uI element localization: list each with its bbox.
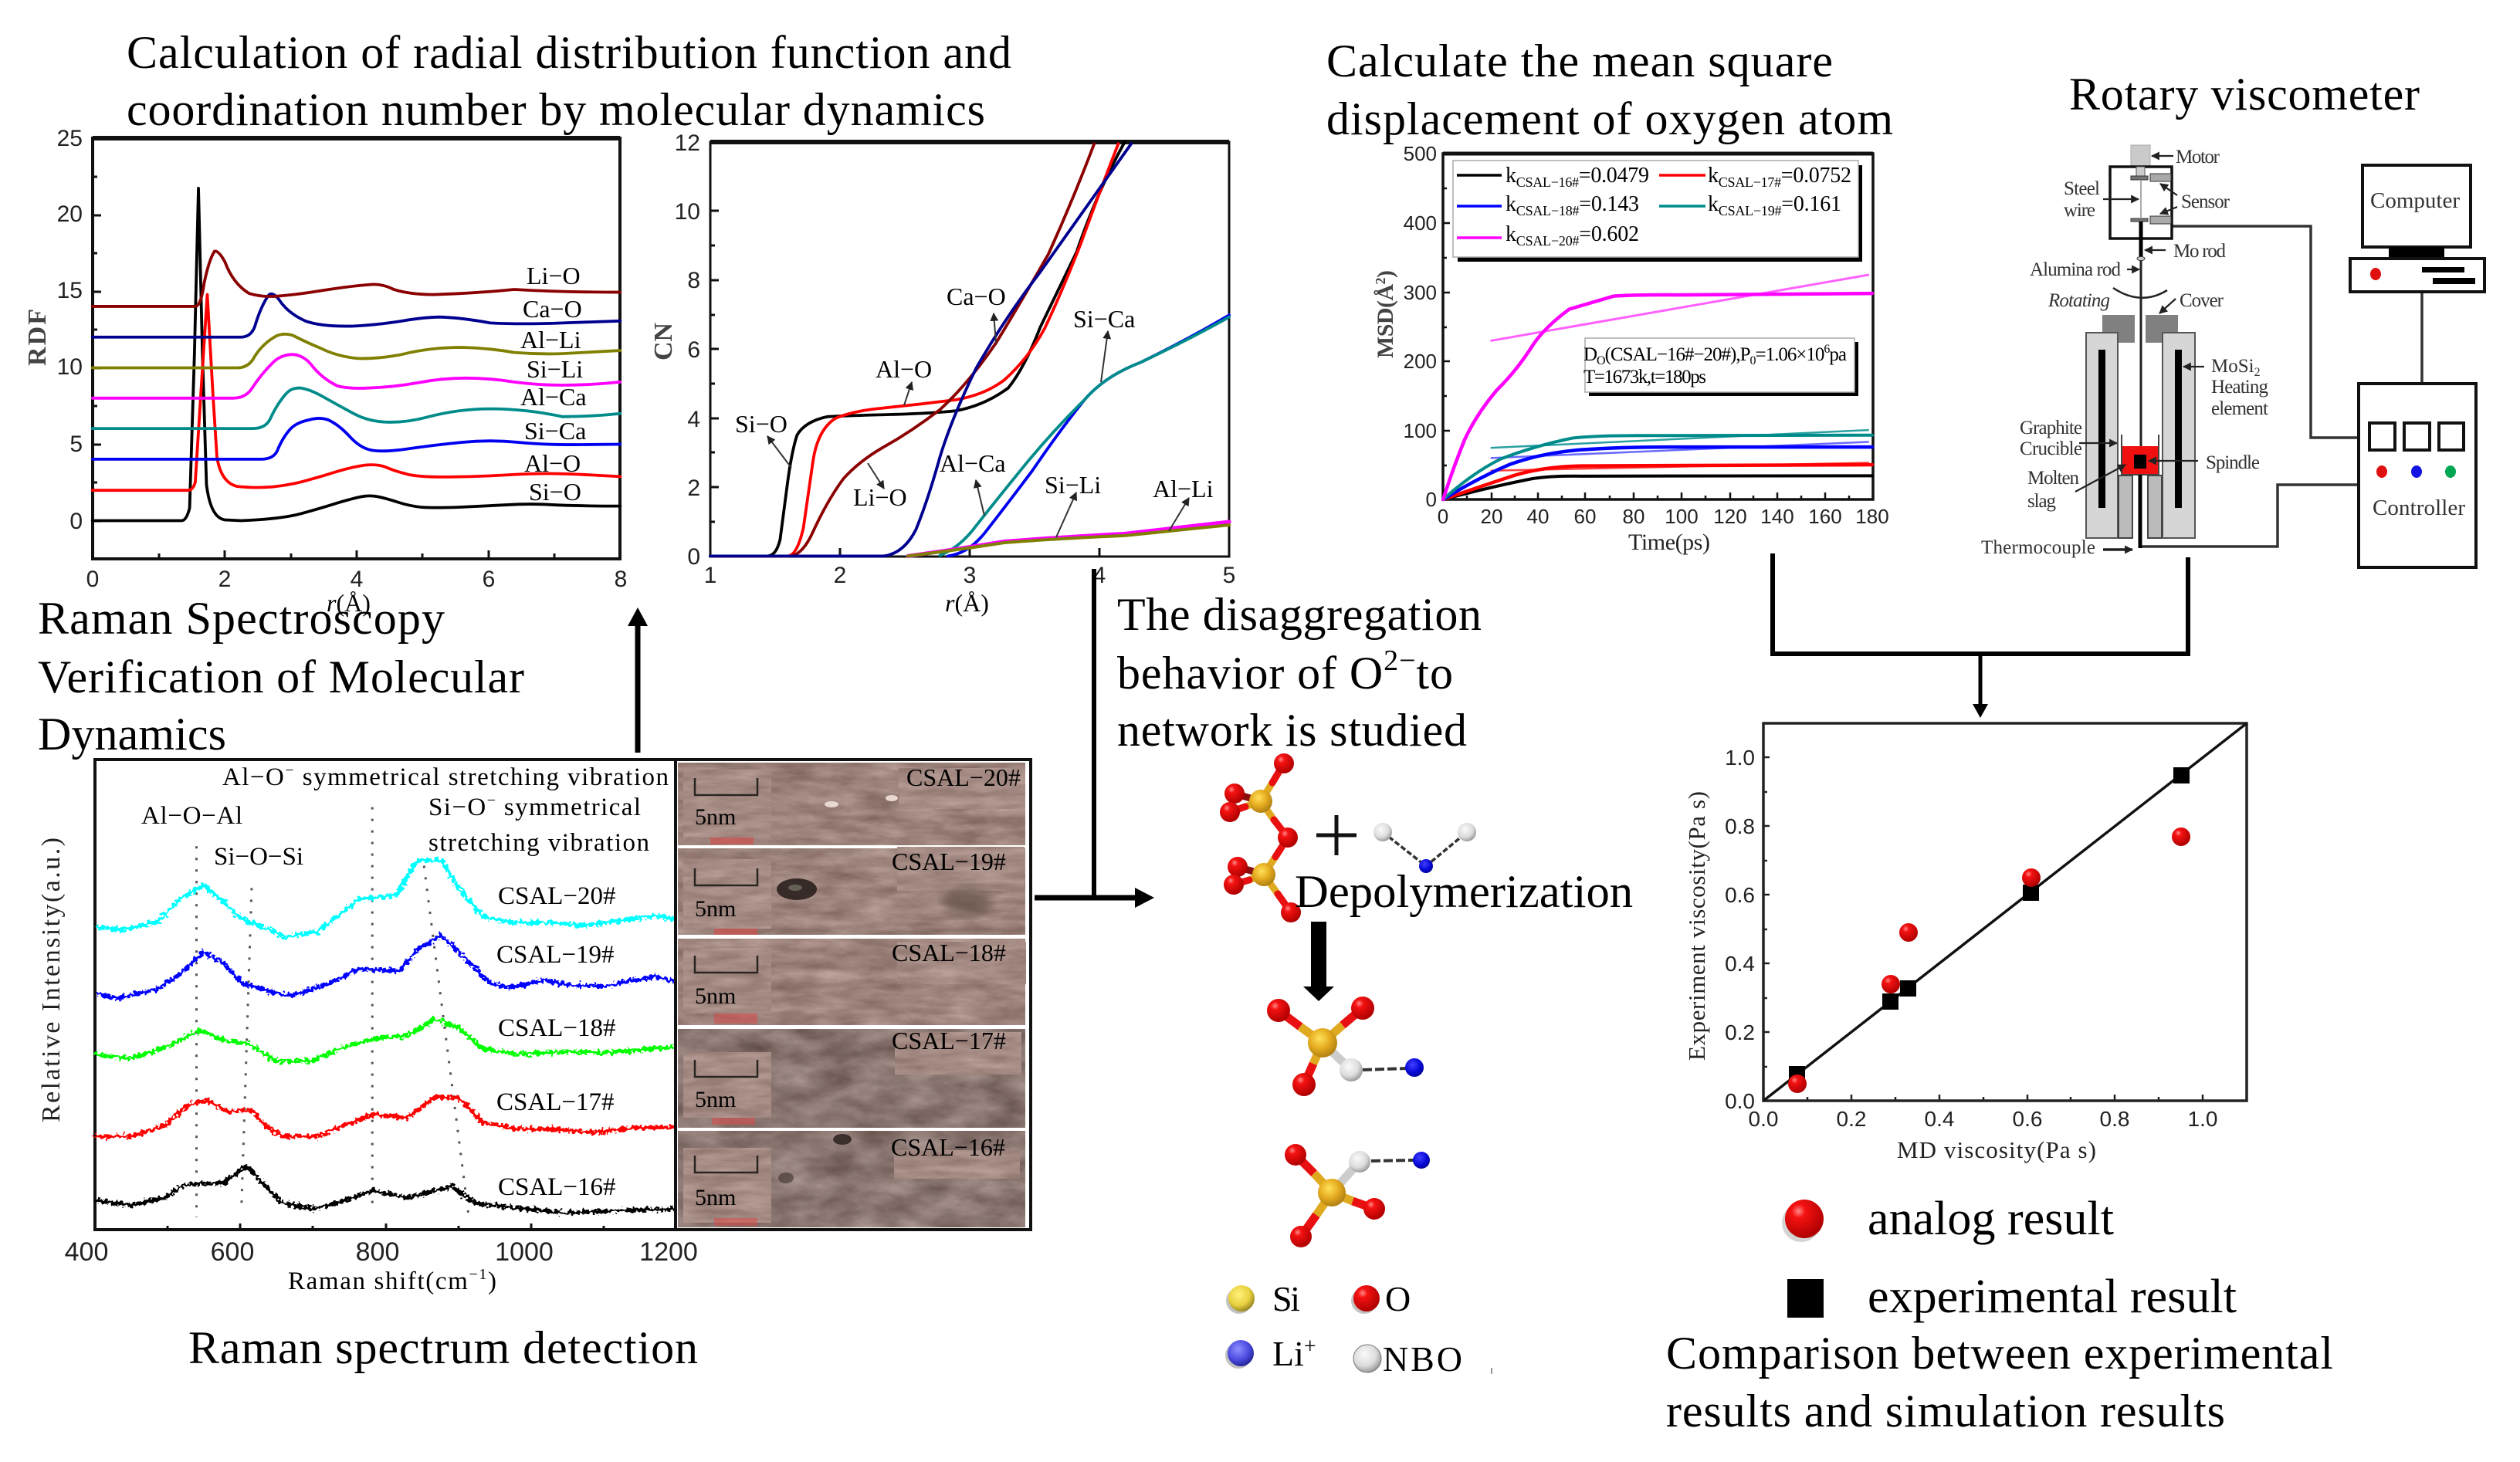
CN axis numbers: 6	[687, 337, 700, 363]
parity axis numbers: 0.0	[1749, 1107, 1778, 1131]
legend: atom types	[1225, 1279, 1462, 1379]
legend O	[1351, 1279, 1411, 1318]
viscometer part labels: Rotating	[2048, 290, 2110, 311]
parity axis numbers: 0.8	[2100, 1107, 2129, 1131]
CN leader arrows	[767, 313, 1189, 537]
CN axis numbers: 8	[687, 268, 700, 293]
Raman guide dotted lines	[197, 807, 469, 1217]
MSD axis numbers	[1404, 142, 1889, 528]
parity axis titles: Experiment viscosity(Pa s)	[1683, 791, 1710, 1061]
MSD parameter box: =1.06×10	[1755, 344, 1824, 365]
RDF curve lines	[93, 188, 620, 520]
computer: Computer	[2370, 188, 2460, 213]
parity axis numbers: 0.8	[1725, 814, 1755, 838]
MSD legend box: =0.0752	[1781, 164, 1851, 188]
Raman band labels: symmetrical stretching vibration	[295, 763, 669, 791]
heading: disaggregation behaviour: to	[1416, 648, 1453, 699]
viscometer leader arrows	[2075, 156, 2204, 550]
heading: Raman verification: Raman Spectroscopy	[38, 593, 445, 644]
connecting wires	[2140, 226, 2422, 547]
CN axis numbers: 0	[687, 544, 700, 570]
MSD axis numbers: 400	[1404, 212, 1437, 235]
molecule: lower silicate with NBO	[1285, 1144, 1430, 1247]
viscometer part labels	[1981, 147, 2268, 558]
Raman sample labels: CSAL−17#	[496, 1088, 614, 1116]
parity line	[1763, 723, 2247, 1101]
heading: disaggregation behaviour: The disaggregation	[1117, 589, 1482, 640]
RDF axis titles: RDF	[23, 309, 52, 366]
viscometer part labels: Steel	[2064, 178, 2100, 199]
CN curve lines	[710, 142, 1229, 556]
Raman band labels: symmetrical	[496, 794, 641, 821]
MSD legend box: k	[1506, 192, 1516, 216]
RDF pair labels	[520, 262, 587, 506]
MSD axis numbers: 140	[1760, 505, 1794, 528]
viscometer part labels: Molten	[2027, 468, 2080, 489]
parity axis numbers: 0.2	[1837, 1107, 1866, 1131]
panel: electron micrographs	[676, 760, 1031, 1230]
Raman axis numbers: 1200	[639, 1237, 698, 1267]
CN pair labels	[735, 283, 1214, 511]
MSD axis titles: Time(ps)	[1628, 530, 1710, 555]
chart: coordination number curves	[649, 130, 1235, 617]
heading: rotary viscometer: Rotary viscometer	[2069, 69, 2420, 120]
micrograph frame	[676, 760, 1031, 1230]
RDF pair labels: Si−Ca	[524, 417, 586, 445]
parity axis numbers: 1.0	[1725, 746, 1755, 770]
MSD legend box	[1453, 161, 1862, 262]
silicate atoms	[1220, 753, 1301, 922]
Raman band labels: stretching vibration	[428, 829, 649, 857]
MSD curves	[1443, 275, 1872, 499]
MSD axis numbers: 20	[1481, 505, 1502, 528]
RDF axis numbers: 0	[69, 509, 83, 534]
legend Li: +	[1304, 1335, 1316, 1359]
Raman sample labels: CSAL−19#	[496, 941, 614, 969]
micrograph CSAL-17	[678, 1027, 1025, 1128]
micrograph CSAL-19	[678, 847, 1025, 935]
MSD axis numbers: 0	[1438, 505, 1448, 528]
CN axis numbers	[675, 130, 1235, 588]
Raman axis numbers: 400	[65, 1237, 108, 1267]
MSD legend box: CSAL−20#	[1516, 233, 1579, 249]
micrograph CSAL-17: 5nm	[695, 1087, 736, 1112]
MSD parameter box: D	[1583, 344, 1597, 365]
heading: radial distribution function	[127, 27, 1011, 135]
MSD axis numbers: 80	[1623, 505, 1644, 528]
RDF axis numbers: 4	[351, 567, 363, 592]
MSD axis titles: 2	[1373, 277, 1388, 284]
Raman band labels: Si−O	[428, 794, 486, 821]
MSD legend box: =0.161	[1781, 192, 1841, 216]
legend Li: Li	[1272, 1334, 1304, 1373]
heading: radial distribution function: Calculation of radial distribution function and	[127, 27, 1011, 78]
controller: Controller	[2373, 496, 2465, 520]
CN axis numbers: 2	[687, 475, 700, 501]
MSD legend box: k	[1708, 192, 1719, 216]
legend O: O	[1385, 1279, 1411, 1318]
MSD axis numbers: 100	[1404, 419, 1437, 442]
heading: disaggregation behaviour: behavior of O	[1117, 648, 1383, 699]
RDF pair labels: Li−O	[527, 262, 581, 289]
CN plot frame	[710, 142, 1229, 557]
Raman axis numbers: 600	[211, 1237, 254, 1267]
CN pair labels: Ca−O	[947, 283, 1006, 310]
experimental markers	[1789, 767, 2190, 1082]
arrow: Raman up to MD	[628, 607, 648, 753]
heading: comparison	[1666, 1328, 2333, 1437]
viscometer part labels: Cover	[2180, 290, 2224, 311]
legend: analog and experimental results	[1782, 1193, 2237, 1323]
micrograph CSAL-16: CSAL−16#	[891, 1133, 1005, 1161]
CN axis numbers: 10	[675, 199, 700, 225]
RDF axis numbers: 8	[615, 567, 627, 592]
arrow: depolymerization down	[1303, 922, 1334, 1001]
chart: Raman spectra	[37, 760, 698, 1295]
micrograph CSAL-20: 5nm	[695, 804, 736, 830]
silicate bonds	[1230, 763, 1291, 912]
parity axis numbers: 0.6	[1725, 883, 1755, 907]
RDF axis titles: r(Å)	[327, 589, 371, 617]
parity axis numbers: 0.4	[1725, 952, 1755, 976]
CN axis numbers: 5	[1223, 563, 1235, 588]
MSD legend box: CSAL−17#	[1719, 174, 1781, 190]
MSD parameter box: 6	[1824, 343, 1830, 356]
Raman band labels: −	[285, 762, 294, 779]
micrograph CSAL-19: CSAL−19#	[892, 848, 1006, 875]
MSD parameter box	[1583, 338, 1858, 396]
parity axis numbers: 0.0	[1725, 1089, 1755, 1113]
MSD axis numbers: 60	[1574, 505, 1596, 528]
RDF pair labels: Al−Li	[520, 326, 581, 354]
RDF pair labels: Al−Ca	[520, 383, 587, 411]
CN axis numbers: 4	[687, 407, 700, 432]
rod	[2113, 222, 2167, 455]
MSD parameter box: (CSAL−16#−20#),P	[1605, 344, 1750, 365]
molecule: linked silicate tetrahedra	[1220, 753, 1301, 922]
Raman axis titles: )	[488, 1267, 496, 1295]
chart: RDF curves	[23, 126, 627, 617]
CN axis numbers: 1	[704, 563, 716, 588]
CN axis numbers: 12	[675, 130, 700, 156]
micrograph CSAL-18: 5nm	[695, 983, 736, 1009]
Raman sample labels	[496, 882, 615, 1201]
viscometer part labels: Motor	[2176, 147, 2220, 168]
heading: Raman spectrum detection: Raman spectrum detection	[188, 1322, 698, 1373]
heading: Raman verification: Verification of Molecular	[38, 651, 524, 702]
CN pair labels: Si−Ca	[1073, 305, 1135, 333]
MSD axis numbers: 100	[1665, 505, 1699, 528]
viscometer part labels: element	[2211, 398, 2268, 419]
viscometer part labels: Graphite	[2020, 418, 2082, 438]
heading: disaggregation behaviour: network is studied	[1117, 705, 1467, 756]
Raman axis numbers: 800	[356, 1237, 399, 1267]
viscometer part labels: Mo rod	[2173, 241, 2227, 262]
Raman axis titles: Raman shift(cm	[288, 1267, 468, 1295]
MSD axis titles: MSD(Å	[1373, 284, 1398, 358]
computer	[2350, 165, 2484, 292]
parity axis titles: MD viscosity(Pa s)	[1897, 1136, 2096, 1163]
heading: radial distribution function: coordination number by molecular dynamics	[127, 84, 985, 135]
RDF axis numbers: 5	[69, 431, 83, 457]
Raman axis titles: Relative Intensity(a.u.)	[37, 838, 66, 1122]
Raman sample labels: CSAL−18#	[498, 1014, 615, 1042]
legend Si	[1226, 1279, 1300, 1318]
legend experimental: experimental result	[1868, 1271, 2237, 1323]
RDF axis numbers	[57, 126, 627, 592]
furnace walls	[2086, 333, 2195, 538]
heading: mean square displacement: Calculate the mean square	[1326, 36, 1833, 86]
Raman axis titles	[37, 838, 496, 1295]
CN pair labels: Li−O	[853, 483, 907, 511]
RDF plot frame	[93, 138, 620, 559]
RDF pair labels: Si−Li	[527, 355, 583, 383]
Raman band labels: −	[487, 792, 496, 809]
Raman frame	[95, 760, 676, 1230]
CN pair labels: Al−O	[876, 355, 932, 383]
CN axis numbers: 3	[964, 563, 976, 588]
controller	[2359, 384, 2476, 567]
CN pair labels: Si−O	[735, 410, 788, 438]
Raman band labels: Al−O	[222, 763, 284, 791]
micrograph CSAL-16: 5nm	[695, 1185, 736, 1210]
heading: comparison: Comparison between experimental	[1666, 1328, 2333, 1379]
MSD axis numbers: 160	[1808, 505, 1842, 528]
RDF axis numbers: 6	[483, 567, 495, 592]
micrograph CSAL-20	[678, 763, 1025, 845]
viscometer part labels: MoSi	[2211, 356, 2254, 377]
Raman band labels: Al−O−Al	[141, 802, 242, 830]
Raman axis titles: −1	[469, 1266, 486, 1283]
MSD legend box: k	[1506, 222, 1516, 246]
CN axis numbers: 4	[1093, 563, 1106, 588]
MSD parameter box: 0	[1749, 354, 1756, 367]
RDF axis numbers: 10	[57, 354, 83, 380]
viscometer part labels: Sensor	[2181, 191, 2230, 212]
viscometer part labels: Spindle	[2206, 452, 2260, 473]
viscometer part labels: wire	[2064, 200, 2095, 221]
MSD axis numbers: 180	[1855, 505, 1889, 528]
RDF axis numbers: 20	[57, 201, 83, 227]
label: Depolymerization: Depolymerization	[1295, 866, 1633, 918]
MSD frame	[1443, 154, 1873, 499]
Raman sample labels: CSAL−16#	[498, 1173, 615, 1201]
parity axis numbers: 0.4	[1925, 1107, 1954, 1131]
MSD legend box: CSAL−19#	[1719, 203, 1781, 218]
heading: disaggregation behaviour	[1117, 589, 1482, 756]
heading: mean square displacement: displacement of oxygen atom	[1326, 93, 1893, 144]
heading: disaggregation behaviour: 2−	[1384, 645, 1416, 677]
parity axis numbers: 0.6	[2013, 1107, 2042, 1131]
arrow: Raman to depolymerization and up to CN	[1035, 569, 1154, 908]
chart: experiment vs MD viscosity	[1683, 723, 2247, 1163]
motor	[2131, 145, 2150, 167]
CN axis numbers: 2	[834, 563, 846, 588]
CN pair labels: Al−Ca	[940, 449, 1006, 477]
micrograph CSAL-17: CSAL−17#	[892, 1027, 1006, 1054]
MSD legend box: CSAL−18#	[1516, 203, 1579, 218]
parity axis numbers: 1.0	[2188, 1107, 2217, 1131]
legend analog: analog result	[1868, 1193, 2114, 1245]
MSD parameter box: T=1673k,t=180ps	[1583, 367, 1706, 387]
CN pair labels: Al−Li	[1153, 475, 1214, 503]
MSD axis numbers: 0	[1426, 488, 1437, 511]
MSD legend box: =0.0479	[1579, 164, 1649, 188]
CN pair labels: Si−Li	[1045, 471, 1101, 499]
MSD legend box: k	[1506, 164, 1516, 188]
MSD legend box: k	[1708, 164, 1719, 188]
Raman band labels: Si−O−Si	[214, 843, 303, 871]
MSD axis numbers: 120	[1713, 505, 1747, 528]
RDF pair labels: Si−O	[529, 478, 581, 506]
MSD legend box: =0.143	[1579, 192, 1639, 216]
heading: comparison: results and simulation results	[1666, 1386, 2225, 1437]
CN axis titles: CN	[649, 322, 678, 360]
furnace covers	[2102, 315, 2135, 343]
Raman band labels	[141, 762, 669, 871]
MSD axis numbers: 500	[1404, 142, 1437, 165]
micrograph CSAL-19: 5nm	[695, 896, 736, 922]
MSD legend box: CSAL−16#	[1516, 174, 1579, 190]
micrograph CSAL-20: CSAL−20#	[906, 763, 1021, 791]
RDF pair labels: Ca−O	[523, 295, 582, 323]
heading: Raman verification	[38, 593, 524, 760]
RDF pair labels: Al−O	[524, 449, 581, 477]
molecule: lithium with two NBO	[1373, 823, 1476, 873]
MSD axis titles: )	[1373, 270, 1398, 278]
legend Si: Si	[1272, 1279, 1300, 1318]
MSD axis titles	[1373, 270, 1710, 555]
parity axis titles	[1683, 791, 2096, 1163]
RDF axis numbers: 25	[57, 126, 83, 151]
RDF axis titles	[23, 309, 371, 617]
MSD axis numbers: 40	[1527, 505, 1549, 528]
RDF axis numbers: 0	[86, 567, 99, 592]
analog markers	[1788, 827, 2190, 1093]
viscometer part labels: 2	[2254, 366, 2261, 379]
parity axis numbers	[1725, 746, 2217, 1131]
Raman spectra lines	[97, 860, 674, 1213]
Raman axis numbers	[65, 1237, 698, 1267]
viscometer part labels: Crucible	[2020, 438, 2082, 459]
legend NBO: NBO	[1383, 1339, 1462, 1379]
MSD axis numbers: 300	[1404, 281, 1437, 304]
Raman axis numbers: 1000	[495, 1237, 554, 1267]
legend Li	[1225, 1334, 1316, 1373]
micrograph CSAL-18	[678, 939, 1026, 1025]
MSD parameter box: pa	[1829, 344, 1847, 365]
viscometer part labels: Thermocouple	[1981, 537, 2095, 558]
micrograph CSAL-16	[678, 1131, 1025, 1227]
heading: Raman verification: Dynamics	[38, 709, 226, 760]
MSD axis numbers: 200	[1404, 350, 1437, 373]
RDF axis numbers: 15	[57, 278, 83, 303]
molecule: upper silicate with NBO	[1267, 997, 1424, 1096]
CN axis titles	[649, 322, 989, 617]
Raman sample labels: CSAL−20#	[498, 882, 615, 910]
RDF axis numbers: 2	[218, 567, 231, 592]
chart: mean square displacement	[1373, 142, 1889, 555]
parity frame	[1763, 723, 2247, 1101]
diagram: rotary viscometer	[1981, 145, 2484, 567]
flow bracket: MSD and viscometer to comparison	[1773, 553, 2188, 718]
viscometer part labels: Heating	[2211, 377, 2268, 398]
MSD legend box: =0.602	[1579, 222, 1639, 246]
micrograph CSAL-18: CSAL−18#	[892, 939, 1006, 966]
sensor housing	[2110, 167, 2172, 239]
CN axis titles: r(Å)	[945, 589, 989, 617]
crucible with molten slag	[2122, 435, 2159, 548]
symbol: plus	[1316, 815, 1357, 855]
viscometer part labels: Alumina rod	[2030, 259, 2122, 280]
MSD parameter box: O	[1597, 354, 1606, 367]
viscometer part labels: slag	[2027, 491, 2057, 512]
parity axis numbers: 0.2	[1725, 1020, 1755, 1044]
heading: mean square displacement	[1326, 36, 1893, 144]
